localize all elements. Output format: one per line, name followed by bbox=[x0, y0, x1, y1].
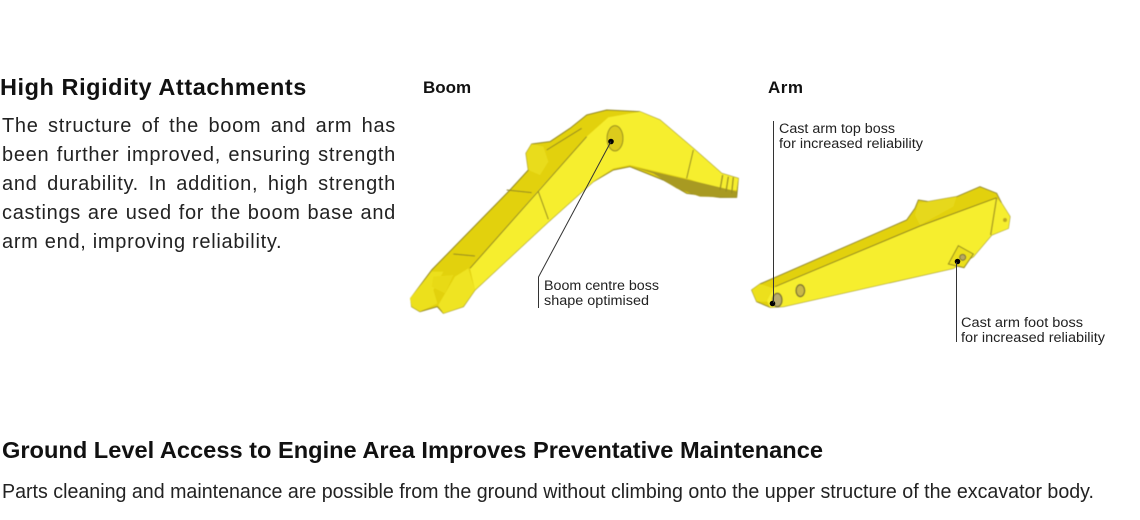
heading: Arm: Arm bbox=[768, 78, 804, 97]
callout: cast arm top boss: for increased reliability bbox=[779, 136, 923, 151]
callout: cast arm foot boss bbox=[955, 259, 1105, 345]
callout: cast arm top boss: Cast arm top boss bbox=[779, 121, 895, 136]
callout: boom centre boss: shape optimised bbox=[544, 293, 649, 308]
callout: boom centre boss bbox=[538, 139, 659, 308]
text block: rigidity description: The structure of the boom and arm has bbox=[2, 115, 396, 137]
heading: High Rigidity Attachments: High Rigidity Attachments bbox=[0, 74, 307, 100]
text block: rigidity description bbox=[2, 115, 396, 253]
heading: Boom: Boom bbox=[423, 78, 471, 97]
callout: cast arm foot boss: for increased reliability bbox=[961, 330, 1105, 345]
text block: ground level description: Parts cleaning and maintenance are possible from the ground without climbing onto the upper structure of the excavator body. bbox=[2, 481, 1094, 503]
text block: rigidity description: and durability. In addition, high strength bbox=[2, 173, 396, 195]
heading: ground level access: Ground Level Access to Engine Area Improves Preventative Maintenance bbox=[2, 437, 823, 463]
callout: cast arm foot boss: Cast arm foot boss bbox=[961, 315, 1083, 330]
text block: rigidity description: castings are used for the boom base and bbox=[2, 202, 396, 224]
text block: rigidity description: been further improved, ensuring strength bbox=[2, 144, 396, 166]
text block: rigidity description: arm end, improving reliability. bbox=[2, 231, 282, 253]
callout: cast arm top boss bbox=[770, 121, 923, 306]
callout: boom centre boss: Boom centre boss bbox=[544, 278, 659, 293]
illustration: arm bbox=[752, 187, 1010, 307]
illustration: boom bbox=[410, 110, 738, 313]
